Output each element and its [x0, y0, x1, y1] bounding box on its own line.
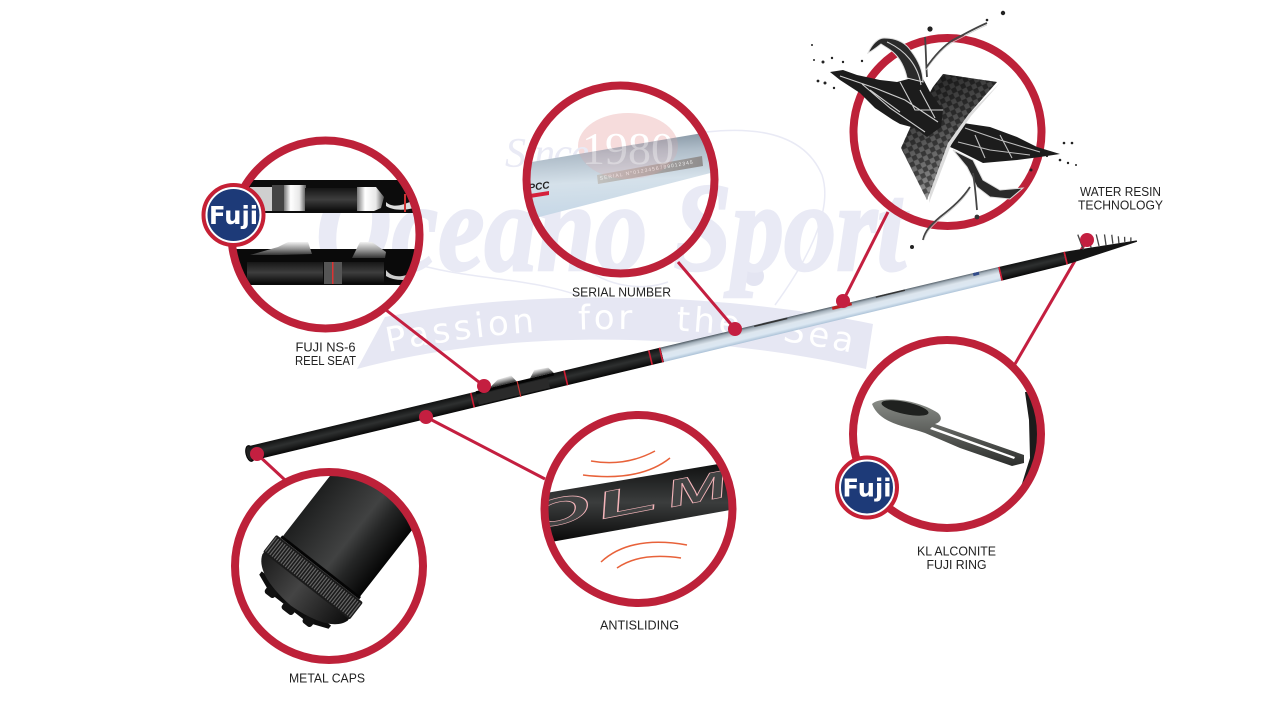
label: water resin technology: TECHNOLOGY: [1078, 198, 1163, 212]
ring: [544, 415, 732, 603]
water splash: lower right: [910, 123, 1077, 249]
badge: Fuji: [837, 458, 897, 518]
badge: Fuji: [204, 185, 264, 245]
label: Fuji NS-6 reel seat: [295, 340, 356, 368]
label: KL Alconite Fuji ring: [917, 544, 996, 572]
rod: red bands: [470, 251, 1068, 408]
fishing rod: [241, 222, 1139, 462]
panel: metal caps: [231, 468, 427, 664]
label: water resin technology: [1078, 184, 1163, 212]
carbon sheet: [901, 74, 1000, 203]
badge: Fuji: Fuji: [209, 201, 258, 230]
panel: KL Alconite Fuji ring: [837, 340, 1041, 528]
connector lines: [257, 212, 1087, 480]
antisliding photo: [548, 464, 728, 542]
rod logo: [530, 182, 550, 198]
label: water resin technology: WATER RESIN: [1080, 184, 1161, 199]
watermark: fishing line: [410, 130, 825, 305]
ring: [854, 38, 1042, 226]
rod lettering: M: [666, 461, 728, 517]
rod lettering: O: [525, 483, 592, 539]
rod: black lower section: [248, 347, 664, 461]
connector dots: [250, 233, 1094, 461]
ring: [526, 86, 714, 274]
panel: water resin technology: [811, 11, 1077, 249]
label: KL Alconite Fuji ring: FUJI RING: [926, 557, 986, 572]
metal cap photo: [259, 476, 412, 629]
label: Fuji NS-6 reel seat: REEL SEAT: [295, 353, 356, 368]
rod: tip: [1063, 235, 1138, 265]
watermark: reel: [744, 266, 764, 286]
label: KL Alconite Fuji ring: KL ALCONITE: [917, 544, 996, 558]
ring: [235, 472, 423, 660]
rod: tip guides: [1078, 223, 1132, 253]
rod: black upper section: [998, 251, 1067, 281]
water splash: upper left: [811, 11, 1005, 137]
rod: butt cap: [244, 445, 256, 462]
watermark: Oceano Sport: Oceano Sport: [316, 159, 909, 298]
rod: printing: [754, 272, 979, 328]
reel seat photo: [236, 180, 414, 285]
badge: Fuji: Fuji: [842, 474, 892, 502]
orange friction arcs: [583, 451, 687, 568]
label: Fuji NS-6 reel seat: FUJI NS-6: [296, 340, 356, 354]
rod lettering: [548, 470, 724, 527]
ring guide photo: [872, 392, 1040, 490]
ring: [232, 140, 420, 328]
watermark: banner: Passion for the Sea: [386, 304, 850, 352]
watermark overlay on tube: [580, 138, 678, 179]
panel: antisliding: [525, 415, 736, 603]
watermark: Since: Since: [505, 131, 589, 177]
watermark: Oceano Sport logo: [316, 113, 910, 369]
label: serial number: SERIAL NUMBER: [572, 284, 671, 300]
watermark overlay on tube: 1980: [582, 123, 674, 174]
watermark: 1980 badge: 1980: [582, 123, 674, 174]
serial number photo: [530, 134, 710, 217]
rod lettering: L: [596, 473, 659, 528]
rod: reel seat hoods: [474, 366, 557, 407]
serial plate: SERIAL N°0123456789012345: [599, 160, 694, 182]
label: antisliding: ANTISLIDING: [600, 618, 679, 632]
label: metal caps: METAL CAPS: [289, 670, 365, 686]
rod: grey middle section: [661, 267, 1002, 362]
rod logo: PCC: [528, 180, 551, 194]
panel: reel seat: [204, 140, 425, 328]
panel: serial number: [520, 86, 730, 274]
ring: [853, 340, 1041, 528]
